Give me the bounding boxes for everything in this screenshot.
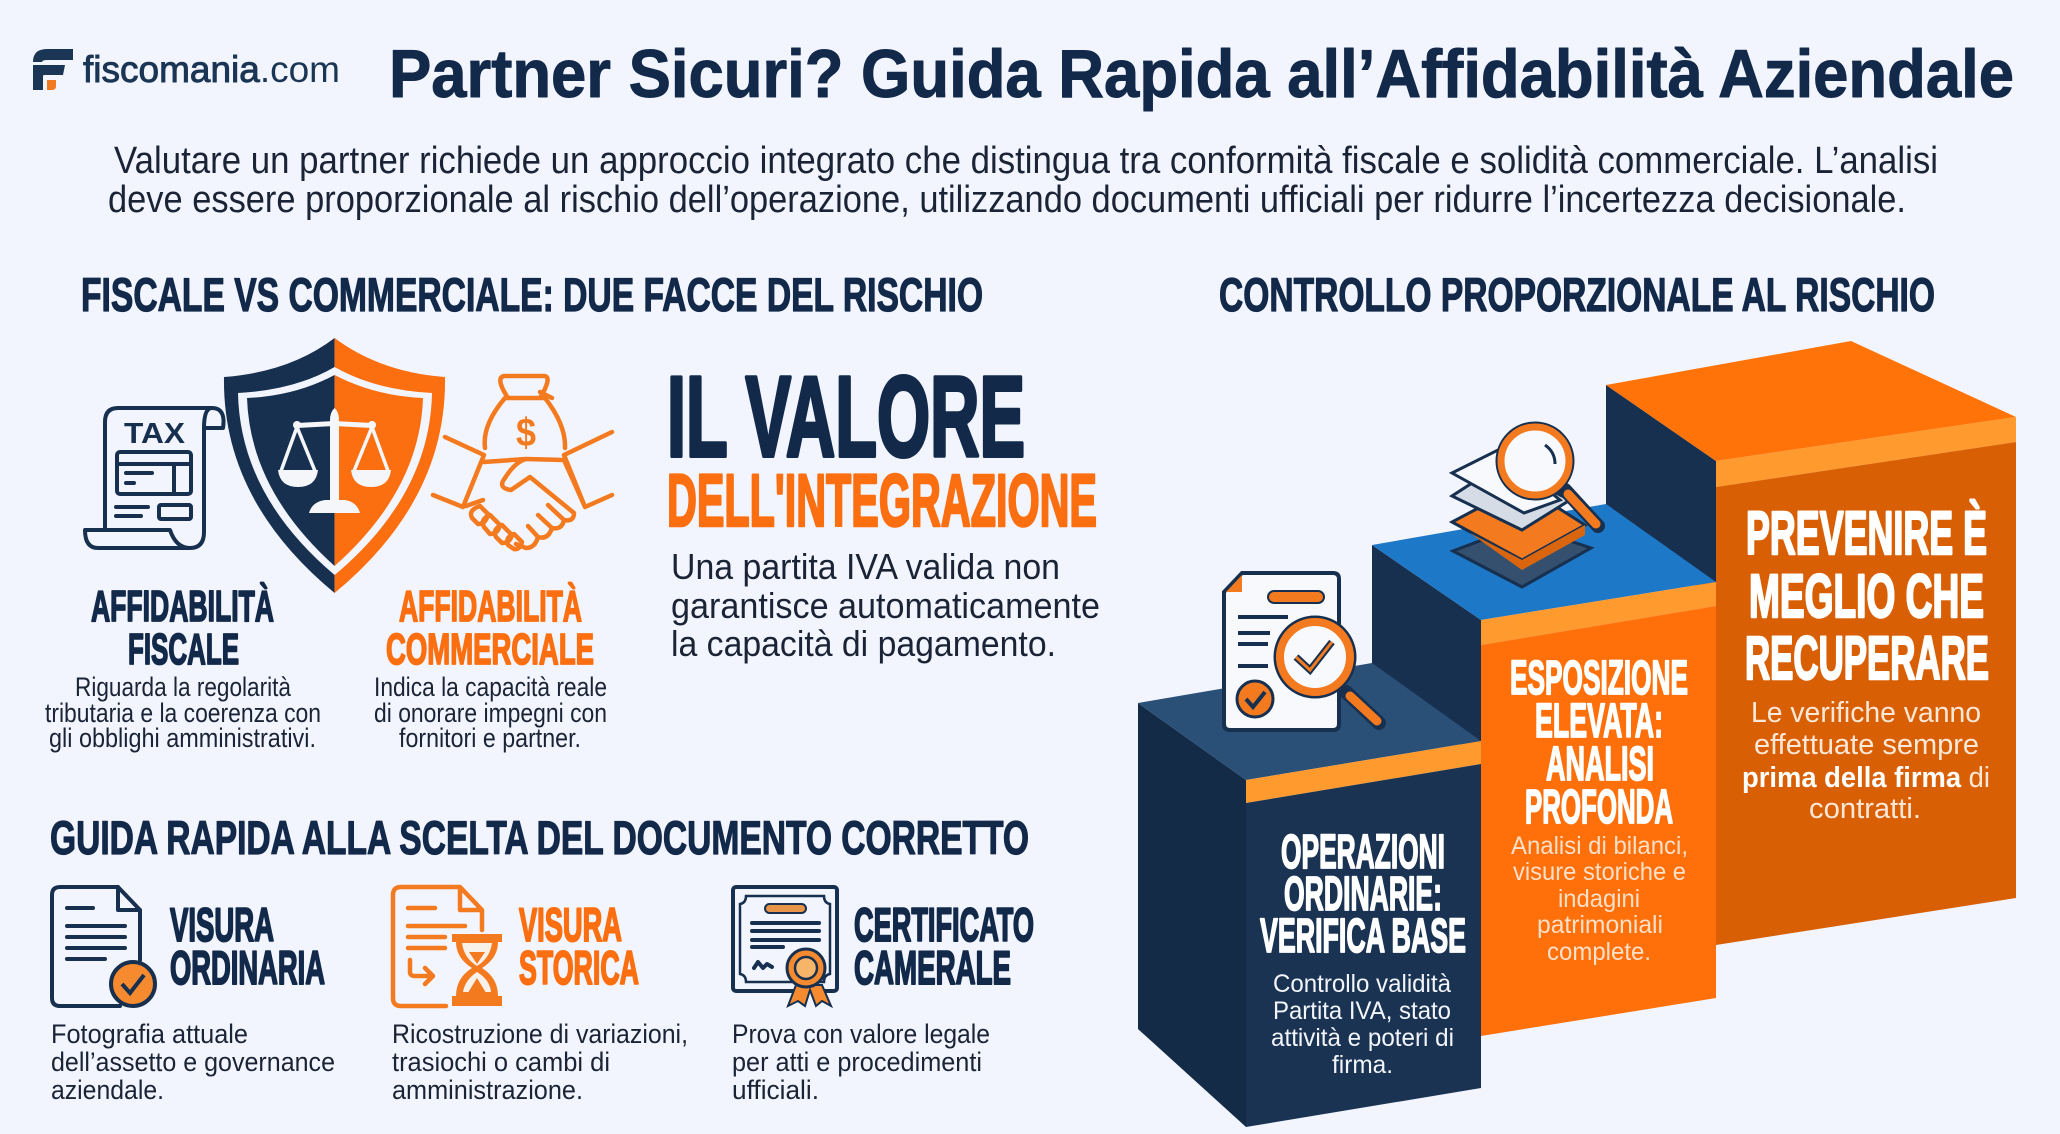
- callout: il valore dell'integrazione: IL VALORE: [667, 354, 1025, 481]
- label: affidabilità fiscale: FISCALE: [128, 625, 239, 674]
- item: visura storica: [392, 887, 688, 1105]
- label: affidabilità fiscale: [91, 581, 274, 674]
- chart: staircase step 2: ESPOSIZIONE: [1510, 652, 1688, 705]
- chart: staircase step 2: [1372, 504, 1716, 1036]
- item: visura ordinaria: Fotografia attuale: [51, 1019, 248, 1049]
- text: affidabilità fiscale description: tributaria e la coerenza con: [45, 698, 321, 728]
- icon: shield with scales: [224, 338, 445, 593]
- label: affidabilità commerciale: AFFIDABILITÀ: [399, 581, 582, 631]
- chart: staircase step 2: Analisi di bilanci,: [1511, 832, 1688, 860]
- item: visura ordinaria: ORDINARIA: [170, 941, 325, 994]
- chart: staircase step 2: PROFONDA: [1525, 781, 1673, 834]
- callout: il valore dell'integrazione: Una partita IVA valida non: [671, 546, 1060, 587]
- chart: staircase step 1: VERIFICA BASE: [1260, 910, 1466, 963]
- chart: staircase step 2: ANALISI: [1546, 738, 1654, 791]
- chart: staircase step 2: ELEVATA:: [1535, 695, 1663, 748]
- chart: staircase step 1: Partita IVA, stato: [1273, 997, 1451, 1025]
- intro paragraph: deve essere proporzionale al rischio dell’operazione, utilizzando documenti ufficiali per ridurre l’incertezza decisionale.: [108, 179, 1906, 221]
- chart: staircase step 1: ORDINARIE:: [1284, 868, 1442, 921]
- chart: staircase step 1: Controllo validità: [1273, 970, 1451, 998]
- text: affidabilità fiscale description: gli obblighi amministrativi.: [49, 723, 316, 753]
- item: certificato camerale: [732, 887, 1034, 1105]
- callout: il valore dell'integrazione: la capacità di pagamento.: [671, 623, 1056, 664]
- heading: guida rapida: GUIDA RAPIDA ALLA SCELTA DEL DOCUMENTO CORRETTO: [50, 811, 1029, 864]
- chart: staircase step 2: complete.: [1547, 938, 1651, 966]
- text: affidabilità commerciale description: [374, 672, 607, 753]
- icon: document with magnifier: [1224, 573, 1379, 730]
- chart: staircase step 2: patrimoniali: [1537, 911, 1663, 939]
- icon: tax document: [85, 408, 224, 548]
- label: affidabilità commerciale: [386, 581, 594, 674]
- item: certificato camerale: ufficiali.: [732, 1075, 819, 1105]
- item: certificato camerale: per atti e procedimenti: [732, 1047, 982, 1077]
- item: visura storica: Ricostruzione di variazioni,: [392, 1019, 688, 1049]
- item: visura storica: trasiochi o cambi di: [392, 1047, 610, 1077]
- intro paragraph: [108, 140, 1938, 221]
- item: visura ordinaria: aziendale.: [51, 1075, 164, 1105]
- text: affidabilità commerciale description: di onorare impegni con: [374, 698, 607, 728]
- item: visura ordinaria: [51, 887, 335, 1105]
- heading: fiscale vs commerciale: FISCALE VS COMMERCIALE: DUE FACCE DEL RISCHIO: [81, 268, 983, 321]
- label: affidabilità commerciale: COMMERCIALE: [386, 625, 594, 674]
- item: visura storica: VISURA: [519, 898, 622, 951]
- item: visura storica: STORICA: [519, 941, 639, 994]
- icon: tax document: TAX: [124, 418, 186, 450]
- callout: il valore dell'integrazione: DELL'INTEGRAZIONE: [667, 459, 1097, 542]
- item: visura ordinaria: VISURA: [170, 898, 274, 951]
- text: affidabilità commerciale description: fornitori e partner.: [399, 723, 581, 753]
- item: visura storica: amministrazione.: [392, 1075, 583, 1105]
- item: certificato camerale: CAMERALE: [854, 941, 1011, 994]
- callout: il valore dell'integrazione: [667, 354, 1100, 664]
- chart: staircase step 1: firma.: [1332, 1051, 1393, 1079]
- text: affidabilità commerciale description: Indica la capacità reale: [374, 672, 607, 702]
- chart: staircase step 3: effettuate sempre: [1754, 729, 1979, 761]
- chart: staircase step 1: attività e poteri di: [1271, 1024, 1454, 1052]
- text: affidabilità fiscale description: [45, 672, 321, 753]
- item: visura ordinaria: dell’assetto e governance: [51, 1047, 335, 1077]
- chart: staircase step 1: [1138, 663, 1481, 1127]
- chart: staircase step 2: indagini: [1558, 885, 1640, 913]
- intro paragraph: Valutare un partner richiede un approccio integrato che distingua tra conformità fiscale e solidità commerciale. L’analisi: [114, 140, 1938, 182]
- icon: handshake and money bag: $: [516, 411, 536, 455]
- chart: staircase step 2: visure storiche e: [1513, 858, 1686, 886]
- icon: handshake and money bag: [433, 376, 612, 549]
- chart: staircase step 3: [1606, 341, 2016, 945]
- logo: fiscomania.com: fiscomania.com: [83, 49, 340, 90]
- chart: staircase step 1: OPERAZIONI: [1281, 826, 1445, 879]
- chart: staircase step 3: contratti.: [1809, 793, 1921, 825]
- text: affidabilità fiscale description: Riguarda la regolarità: [75, 672, 292, 702]
- icon: stacked layers with magnifier: [1452, 423, 1598, 587]
- chart: staircase step 3: prima della firma di: [1742, 762, 1990, 794]
- item: certificato camerale: Prova con valore legale: [732, 1019, 990, 1049]
- callout: il valore dell'integrazione: garantisce automaticamente: [671, 585, 1100, 626]
- item: certificato camerale: CERTIFICATO: [854, 898, 1034, 951]
- chart: staircase step 3: Le verifiche vanno: [1751, 697, 1981, 729]
- label: affidabilità fiscale: AFFIDABILITÀ: [91, 581, 274, 631]
